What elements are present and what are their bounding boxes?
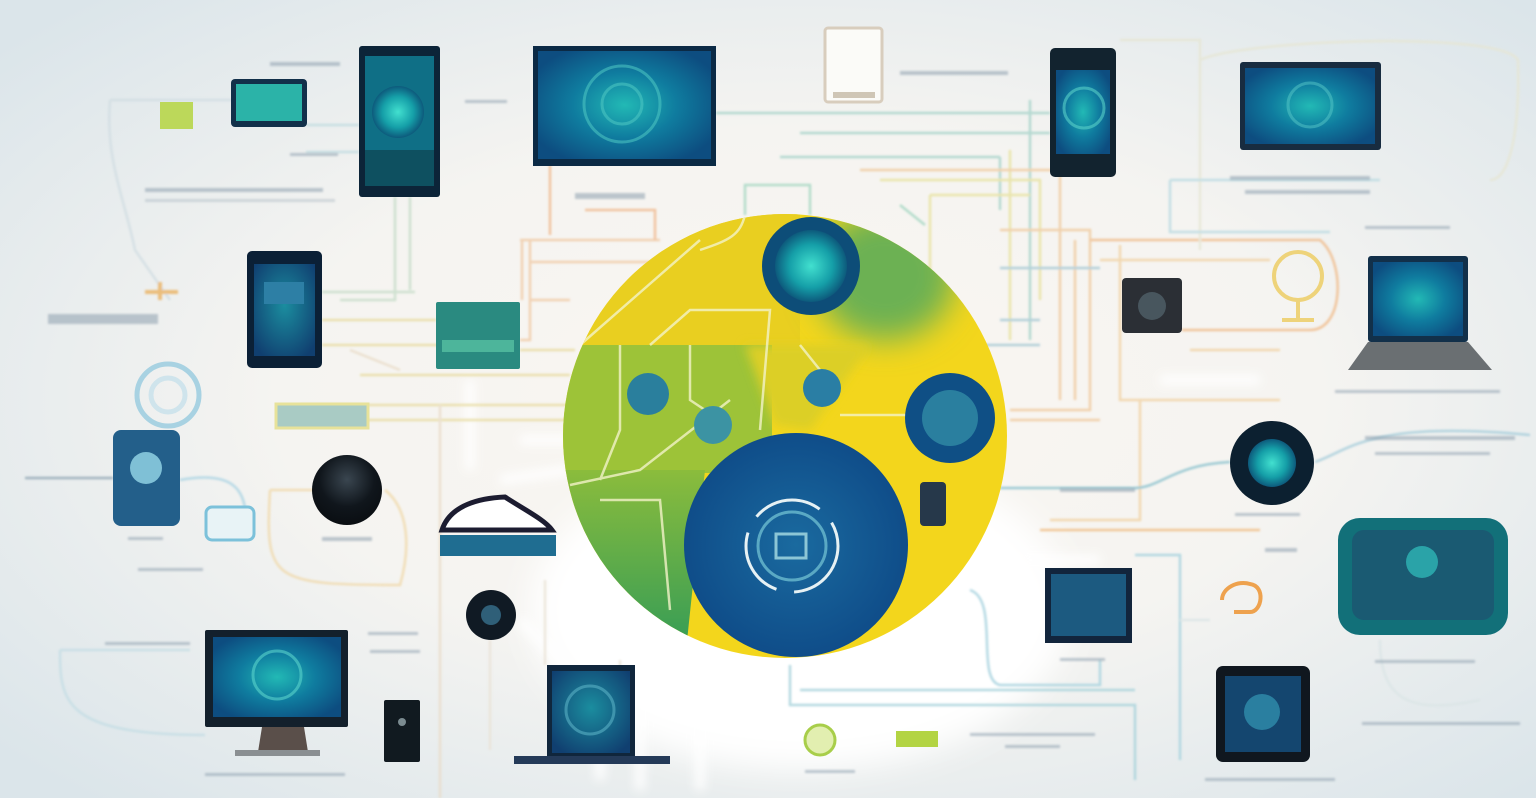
device: router (440, 497, 556, 556)
small sphere nodes (627, 373, 669, 415)
device: lower right tablet (1045, 568, 1132, 643)
device: small round sensor (466, 590, 516, 640)
device: top right phone (1050, 48, 1116, 177)
device: bottom left monitor (205, 630, 348, 756)
sphere body (560, 210, 1010, 660)
sphere circuit lines (570, 215, 910, 610)
device: bottom right tablet (1216, 666, 1310, 762)
connection lines: left (25, 100, 660, 798)
device: camera (1122, 278, 1182, 333)
device: remote (384, 700, 420, 762)
right sphere node (905, 373, 995, 463)
icon: glass globe (137, 364, 199, 426)
device: small tablet (231, 79, 307, 127)
device: right laptop (1348, 256, 1492, 370)
central glow (530, 450, 1070, 770)
icon: orange cloud (1222, 583, 1261, 612)
top sphere node (762, 217, 860, 315)
device: document (825, 28, 882, 102)
device: top monitor (533, 46, 716, 166)
device: left speaker (113, 430, 180, 526)
icon: green note (160, 102, 193, 129)
device: top-left phone (359, 46, 440, 197)
device: top right tablet (1240, 62, 1381, 150)
icon: green badge (805, 725, 835, 755)
icon: ring in blue circle (746, 500, 838, 592)
white streaks (470, 380, 1260, 790)
connection lines: top and right (716, 40, 1530, 780)
icon: yellow bulb (1274, 252, 1322, 320)
device: bottom laptop (514, 665, 670, 764)
device: ring sensor (1230, 421, 1314, 505)
large blue circle (684, 433, 908, 657)
device: left tablet (247, 251, 322, 368)
small dark phone (920, 482, 946, 526)
device: chip (436, 302, 520, 369)
icon: green bar (896, 731, 938, 747)
icon: small outline device (206, 507, 254, 540)
icon: cyan bar (276, 404, 368, 428)
device: large right rounded (1338, 518, 1508, 635)
device: black sphere (312, 455, 382, 525)
central sphere (560, 210, 1010, 660)
